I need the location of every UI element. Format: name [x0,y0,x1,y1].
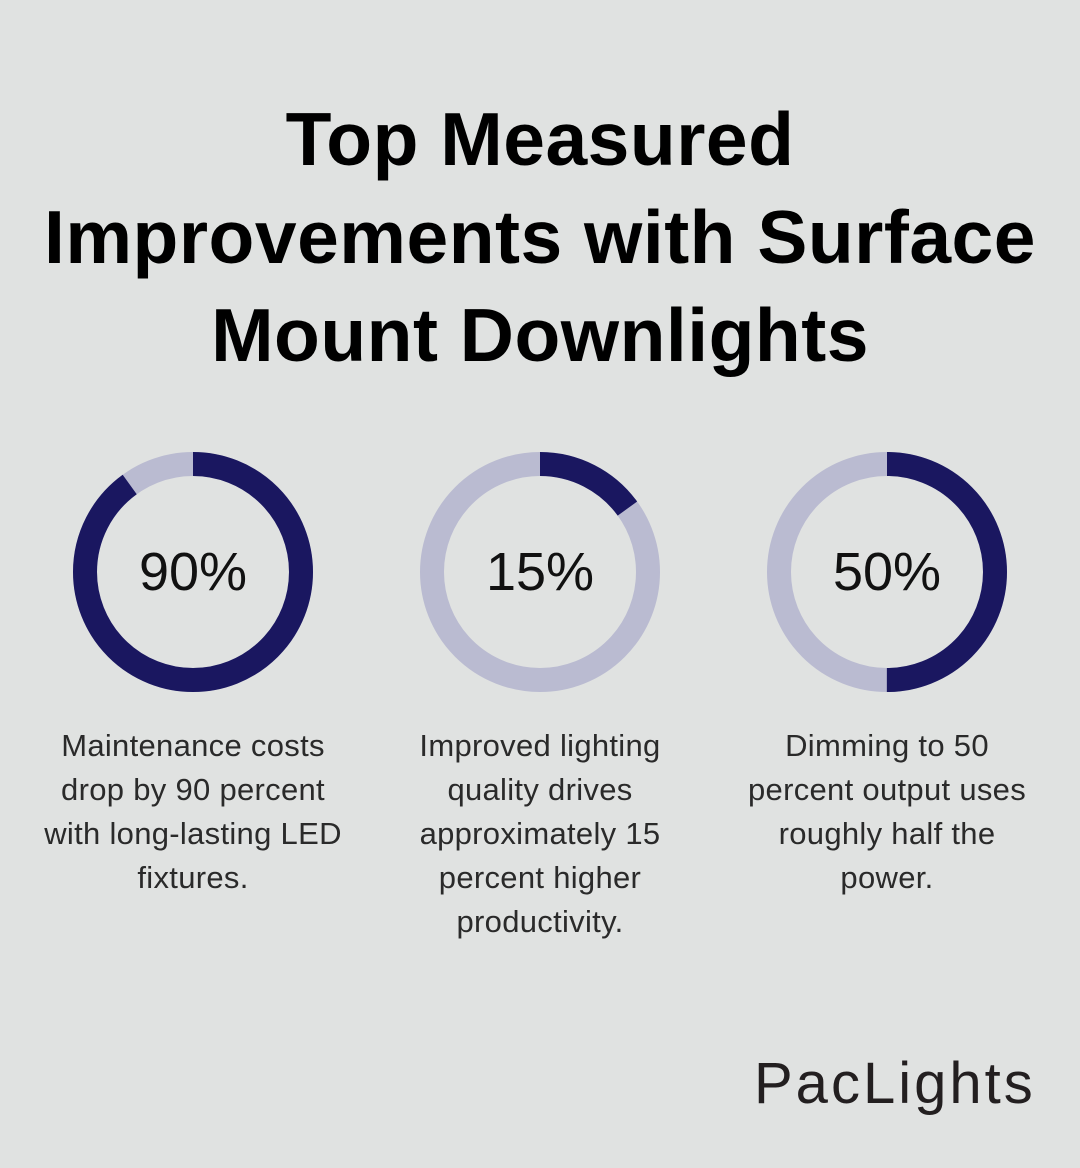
title: Improvements with Surface [44,195,1036,279]
donut 15%: 15% [486,542,594,602]
description: fixtures. [137,860,249,895]
stat: 15% [419,452,661,939]
description: roughly half the [779,816,995,851]
stat: 90% [44,452,342,895]
donut 15% [420,452,660,692]
description: productivity. [456,904,624,939]
donut 90% [73,452,313,692]
description: Dimming to 50 [785,728,989,763]
donut 50% [767,452,1007,692]
donut 50%: 50% [833,542,941,602]
title: Mount Downlights [211,293,869,377]
description: quality drives [447,772,633,807]
description: percent higher [439,860,641,895]
description [44,728,342,895]
description [748,728,1026,895]
stat: 50% [748,452,1026,895]
donut 90%: 90% [139,542,247,602]
description: with long-lasting LED [44,816,342,851]
logo: PacLights [754,1051,1036,1116]
description: Improved lighting [419,728,661,763]
description: drop by 90 percent [61,772,325,807]
description [419,728,661,939]
description: percent output uses [748,772,1026,807]
title: Top Measured [286,97,794,181]
description: Maintenance costs [61,728,325,763]
description: power. [840,860,934,895]
description: approximately 15 [420,816,660,851]
title [44,97,1036,377]
